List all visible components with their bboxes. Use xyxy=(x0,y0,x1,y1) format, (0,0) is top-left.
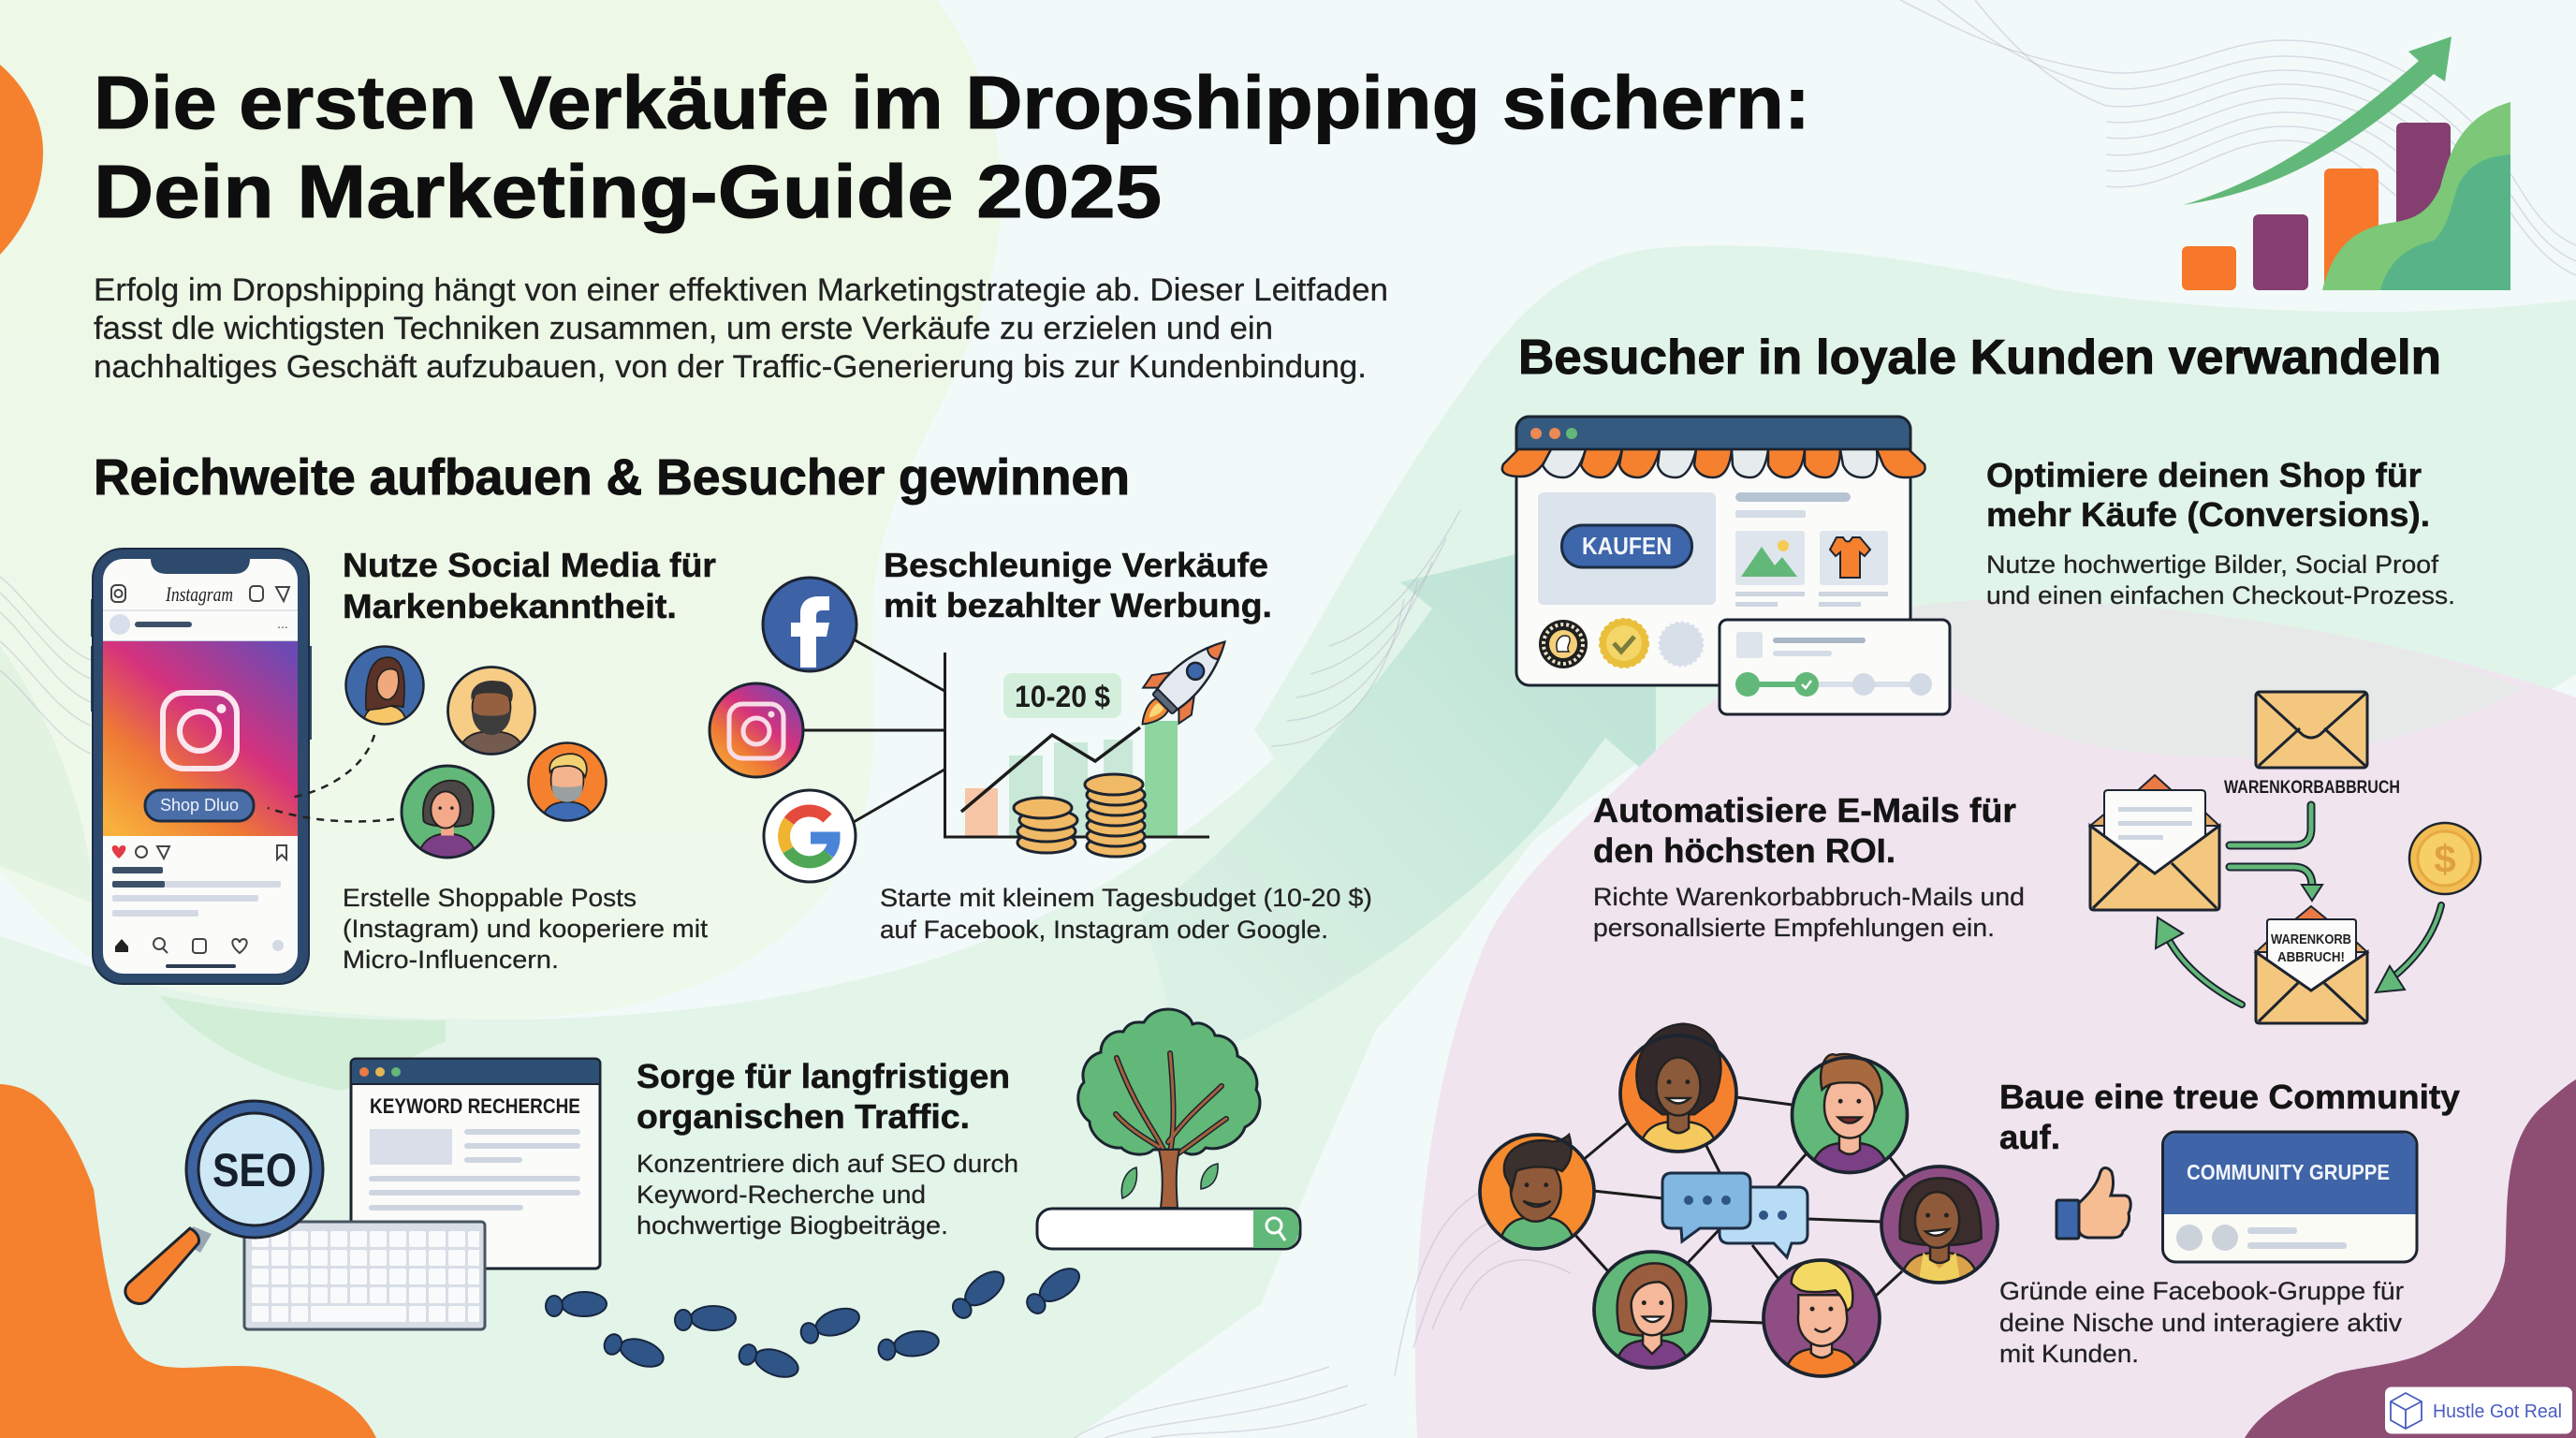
text: social media description: (Instagram) und kooperiere mit xyxy=(343,915,709,943)
trust badges xyxy=(1539,619,1703,668)
phone mockup: ... xyxy=(277,616,288,631)
icon: SEO magnifier: SEO xyxy=(212,1144,297,1196)
card: community group: COMMUNITY GRUPPE xyxy=(2187,1160,2390,1184)
browser: keyword research xyxy=(351,1059,600,1269)
intro text: Erfolg im Dropshipping hängt von einer effektiven Marketingstrategie ab. Dieser Leitfaden xyxy=(94,272,1388,308)
badge: Hustle Got Real xyxy=(2385,1387,2572,1434)
avatar: woman green xyxy=(402,766,493,858)
text: e-mails description: personallsierte Empfehlungen ein. xyxy=(1593,914,1995,942)
avatar: woman green bottom xyxy=(1594,1252,1710,1368)
post image gradient xyxy=(103,641,298,836)
title xyxy=(94,61,1810,233)
text: e-mails description xyxy=(1593,883,2025,942)
search bar xyxy=(1037,1209,1300,1249)
dashed connectors xyxy=(268,735,394,821)
heading: paid ads: Beschleunige Verkäufe xyxy=(884,546,1268,584)
button: shop xyxy=(145,790,254,821)
image tile xyxy=(1735,531,1805,585)
icon: Google xyxy=(764,790,856,882)
button: shop: Shop Dluo xyxy=(160,796,239,814)
text: community description xyxy=(1999,1277,2404,1368)
text: paid ads description: Starte mit kleinem Tagesbudget (10-20 $) xyxy=(880,884,1372,912)
title: Dein Marketing-Guide 2025 xyxy=(94,150,1162,233)
post actions xyxy=(112,845,286,859)
avatar: woman curly hair xyxy=(1620,1024,1736,1152)
t-shirt tile xyxy=(1820,531,1888,585)
icon: open envelope with letter xyxy=(2090,775,2219,910)
avatar: man green xyxy=(1792,1054,1908,1172)
card: community group xyxy=(2162,1132,2417,1262)
label: budget: 10-20 $ xyxy=(1015,680,1110,713)
heading: e-mails xyxy=(1593,791,2016,870)
hero panel with KAUFEN button xyxy=(1538,492,1716,605)
intro text: fasst dle wichtigsten Techniken zusammen, um erste Verkäufe zu erzielen und ein xyxy=(94,311,1273,346)
heading: community xyxy=(1999,1078,2460,1156)
heading: e-mails: den höchsten ROI. xyxy=(1593,831,1895,870)
heading: social media xyxy=(343,546,716,625)
avatar: woman purple right xyxy=(1881,1167,1998,1283)
heading: community: auf. xyxy=(1999,1118,2060,1156)
icon: thumbs up xyxy=(2056,1167,2130,1239)
text: social media description xyxy=(343,884,709,974)
text: community description: mit Kunden. xyxy=(1999,1340,2139,1368)
blob: orange top left xyxy=(0,65,43,255)
icon: dollar coin: $ xyxy=(2434,837,2456,881)
icon: closed envelope xyxy=(2256,692,2367,768)
keyboard xyxy=(244,1222,485,1329)
blob: purple bottom right xyxy=(2245,1079,2576,1438)
community network xyxy=(1480,1024,1998,1376)
avatar: blond man orange xyxy=(528,743,607,820)
intro text xyxy=(94,272,1388,385)
arrow: envelope loop back xyxy=(2156,917,2242,1005)
text: community description: deine Nische und interagiere aktiv xyxy=(1999,1309,2403,1337)
heading: organic traffic: Sorge für langfristigen xyxy=(637,1057,1010,1095)
text: organic traffic description xyxy=(637,1150,1018,1240)
browser: keyword research: KEYWORD RECHERCHE xyxy=(370,1094,580,1118)
footprints xyxy=(546,1262,1085,1382)
blob: orange bottom left xyxy=(0,1084,376,1438)
arrow: coin to envelope xyxy=(2376,905,2441,992)
icon: tree on search bar xyxy=(1037,1009,1300,1249)
heading: social media: Nutze Social Media für xyxy=(343,546,716,584)
heading: conversions xyxy=(1986,456,2430,534)
icon: envelope with abandoned cart letter xyxy=(2256,906,2367,1023)
avatar: bearded man xyxy=(447,667,535,755)
icon: Facebook xyxy=(763,578,856,671)
text: conversions description: Nutze hochwertige Bilder, Social Proof xyxy=(1986,550,2439,579)
text: social media description: Micro-Influencern. xyxy=(343,946,559,974)
heading: paid ads xyxy=(884,546,1272,624)
icon: envelope with abandoned cart letter: ABBRUCH! xyxy=(2277,949,2345,965)
checkout card xyxy=(1720,620,1950,714)
icon: rocket xyxy=(1122,623,1244,744)
hero panel with KAUFEN button: KAUFEN xyxy=(1582,532,1672,560)
icon: cube xyxy=(2391,1393,2422,1429)
heading: organic traffic xyxy=(637,1057,1010,1136)
branches xyxy=(1116,1053,1226,1208)
heading: conversions: Optimiere deinen Shop für xyxy=(1986,456,2422,494)
label: Warenkorbabbruch: WARENKORBABBRUCH xyxy=(2224,778,2400,798)
icon: SEO magnifier xyxy=(125,1101,323,1303)
text: organic traffic description: Konzentriere dich auf SEO durch xyxy=(637,1150,1018,1178)
heading: social media: Markenbekanntheit. xyxy=(343,587,677,625)
heading: paid ads: mit bezahlter Werbung. xyxy=(884,586,1272,624)
awning xyxy=(1502,449,1925,477)
arrow: connector to open envelope xyxy=(2230,805,2311,845)
email flow xyxy=(2090,692,2481,1023)
text: social media description: Erstelle Shoppable Posts xyxy=(343,884,637,912)
section heading: Besucher: Besucher in loyale Kunden verwandeln xyxy=(1518,330,2441,385)
icon: Instagram top bar: Instagram xyxy=(165,582,233,606)
badge: Hustle Got Real: Hustle Got Real xyxy=(2433,1401,2562,1422)
connector lines: ad channels xyxy=(803,639,944,822)
bottom nav xyxy=(115,938,284,953)
heading: e-mails: Automatisiere E-Mails für xyxy=(1593,791,2016,829)
intro text: nachhaltiges Geschäft aufzubauen, von der Traffic-Generierung bis zur Kundenbindung. xyxy=(94,349,1367,385)
avatar: woman blue xyxy=(346,646,423,725)
section heading: Reichweite: Reichweite aufbauen & Besucher gewinnen xyxy=(94,449,1130,506)
heading: organic traffic: organischen Traffic. xyxy=(637,1097,970,1136)
icon: dollar coin xyxy=(2409,823,2481,894)
arrow: connector to abandoned-cart envelope xyxy=(2230,867,2322,901)
text: paid ads description: auf Facebook, Instagram oder Google. xyxy=(880,916,1328,944)
chart: ad growth xyxy=(945,623,1244,857)
network lines xyxy=(1573,1097,1906,1323)
icon: Instagram logo xyxy=(163,693,237,769)
label: budget xyxy=(1003,673,1121,718)
heading: community: Baue eine treue Community xyxy=(1999,1078,2460,1116)
icon: Instagram xyxy=(710,683,803,777)
text: organic traffic description: hochwertige Biogbeiträge. xyxy=(637,1211,948,1240)
chart icon: growth bars and arrow xyxy=(2182,37,2510,290)
text: organic traffic description: Keyword-Recherche und xyxy=(637,1181,926,1209)
heading: conversions: mehr Käufe (Conversions). xyxy=(1986,495,2430,534)
text: conversions description xyxy=(1986,550,2455,609)
phone mockup xyxy=(91,549,312,984)
text: community description: Gründe eine Facebook-Gruppe für xyxy=(1999,1277,2404,1305)
icon: coin stacks xyxy=(1014,774,1146,857)
shop window xyxy=(1502,417,1950,714)
title: Die ersten Verkäufe im Dropshipping sichern: xyxy=(94,61,1810,144)
text: e-mails description: Richte Warenkorbabbruch-Mails und xyxy=(1593,883,2025,911)
chat bubbles xyxy=(1662,1173,1808,1257)
text: paid ads description xyxy=(880,884,1372,944)
text: conversions description: und einen einfachen Checkout-Prozess. xyxy=(1986,581,2455,609)
avatar: blond man purple xyxy=(1764,1260,1880,1376)
avatar: man left xyxy=(1480,1135,1594,1249)
icon: envelope with abandoned cart letter: WARENKORB xyxy=(2271,932,2351,947)
icon: Instagram top bar xyxy=(111,582,289,606)
